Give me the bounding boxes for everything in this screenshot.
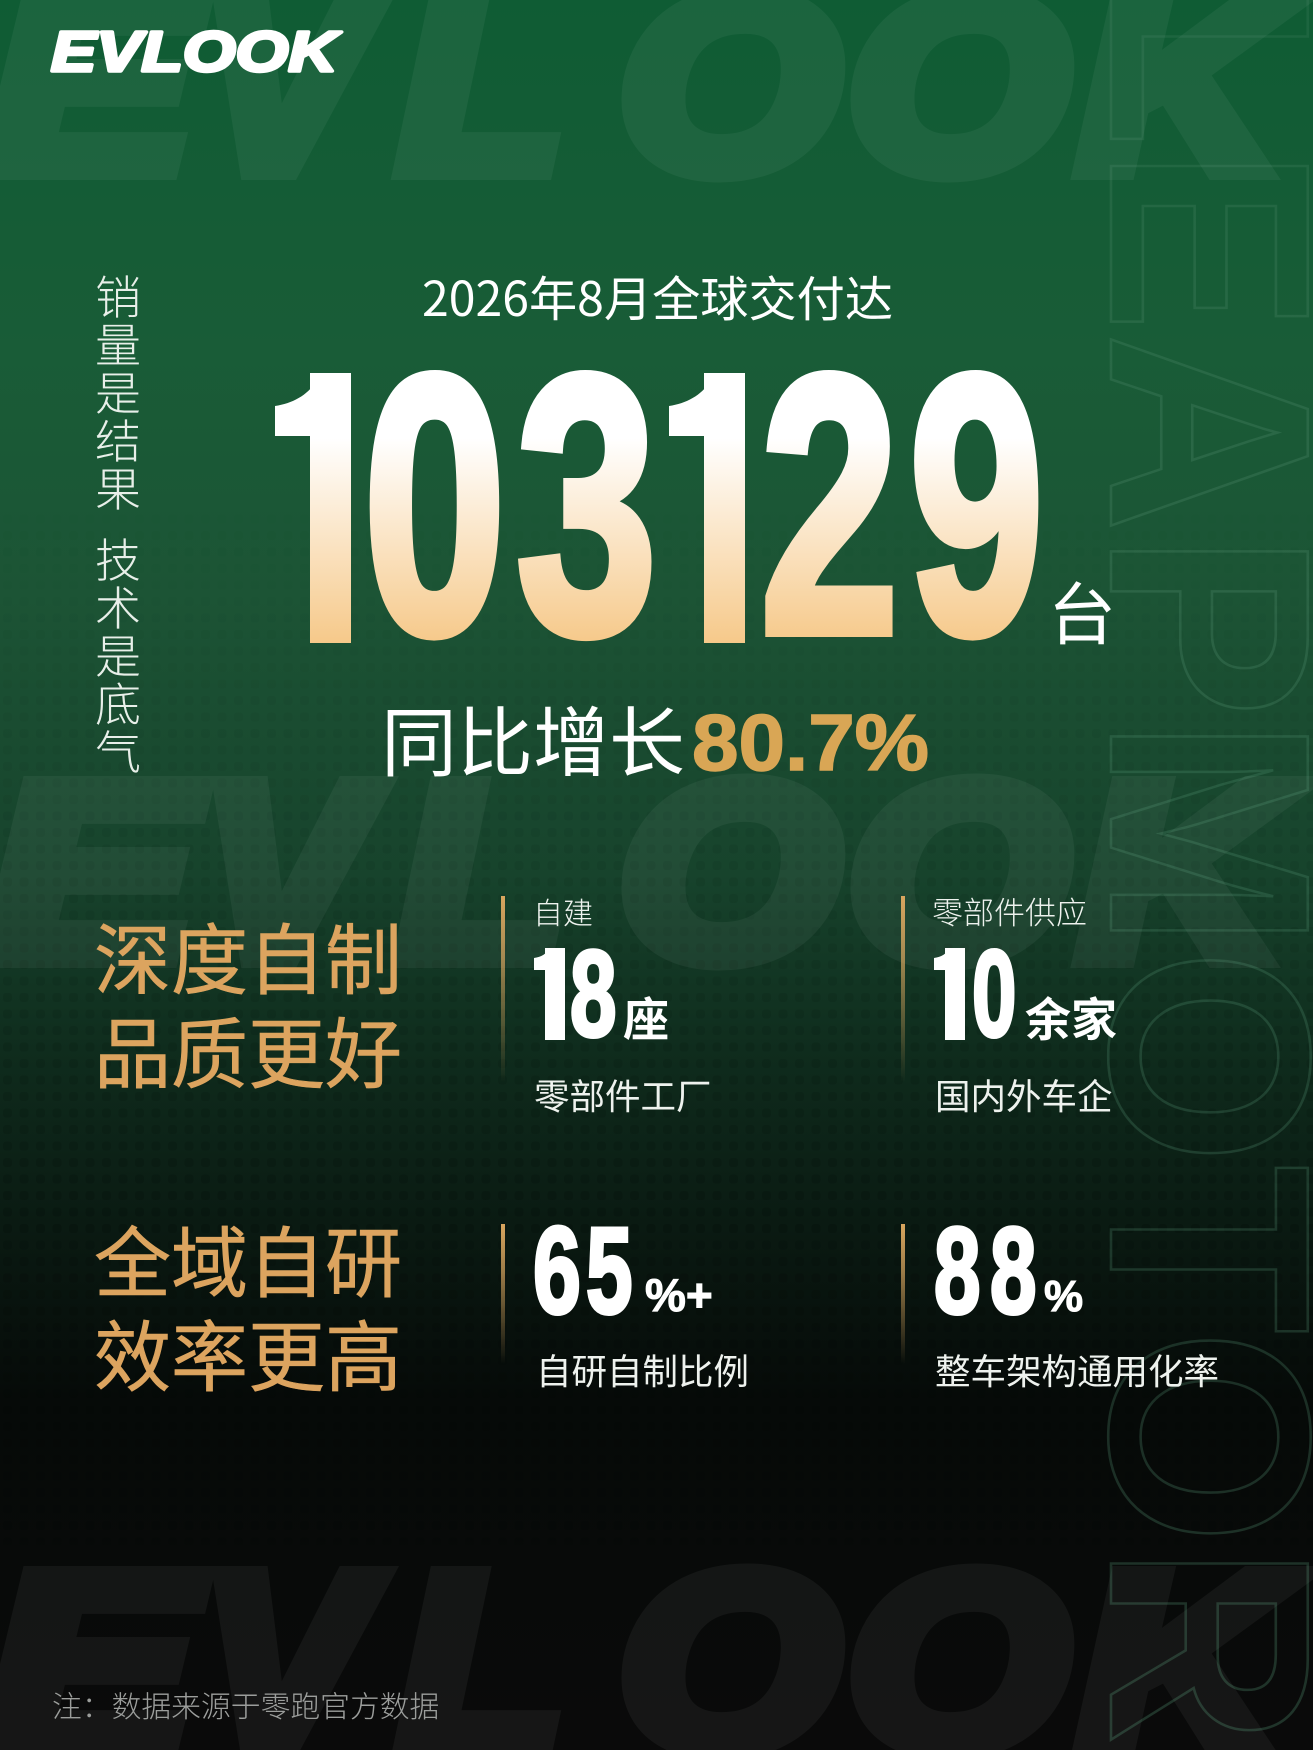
- watermark: EVLOOK middle: L: [399, 732, 564, 1012]
- heading: 全域自研 效率更高: 效率更高: [94, 1316, 402, 1402]
- watermark: EVLOOK middle: [0, 732, 1304, 1012]
- stat: 65%+: 5: [586, 1203, 633, 1340]
- growth label: 同比增长: [381, 702, 685, 787]
- stat: 88%: 整车架构通用化率: [935, 1352, 1219, 1392]
- stat: 10 suppliers: 0: [972, 925, 1016, 1062]
- stat: 10 suppliers: [901, 896, 1117, 1117]
- stat: 10 suppliers: 1: [914, 926, 982, 1063]
- main number 103129: 9: [909, 300, 1044, 711]
- stat: 65%+: 自研自制比例: [536, 1352, 749, 1392]
- watermark: EVLOOK middle: K: [1079, 732, 1304, 1011]
- stat: 18 factories: 座: [623, 994, 669, 1046]
- stat: 65%+: [501, 1203, 749, 1392]
- stat: 10 suppliers: 零部件供应: [932, 896, 1087, 931]
- stat: 18 factories: 自建: [533, 898, 593, 931]
- stat: 88%: [901, 1203, 1219, 1392]
- logo: EVLOOK: EVLOOK: [51, 20, 342, 84]
- stat: 18 factories: [501, 896, 712, 1117]
- stat: 18 factories: 8: [570, 926, 617, 1063]
- growth value: 80.7%: [692, 698, 929, 787]
- watermark: EVLOOK middle: O: [848, 732, 1068, 1011]
- stat: 65%+: 6: [533, 1203, 581, 1340]
- footnote: 注：数据来源于零跑官方数据: [52, 1691, 439, 1724]
- watermark: EVLOOK middle: V: [202, 733, 383, 1012]
- heading: 全域自研 效率更高: [94, 1222, 402, 1402]
- stat: 88%: 8: [990, 1203, 1037, 1340]
- stat: 65%+: %+: [645, 1269, 713, 1321]
- heading: 全域自研 效率更高: 全域自研: [94, 1222, 402, 1308]
- stat: 18 factories: 零部件工厂: [534, 1077, 712, 1117]
- watermark: EVLOOK bottom: [0, 1522, 1304, 1750]
- main number 103129: 1: [221, 300, 405, 711]
- main number 103129: 2: [760, 299, 899, 710]
- main number 103129: 1: [615, 300, 799, 711]
- stat: 10 suppliers: 国内外车企: [935, 1077, 1113, 1117]
- stat: 18 factories: 1: [514, 926, 582, 1063]
- stat: 88%: %: [1044, 1272, 1083, 1321]
- subtitle: 2026年8月全球交付达: [422, 260, 893, 330]
- stat: 10 suppliers: 余家: [1025, 994, 1117, 1046]
- main number 103129: 3: [516, 299, 657, 710]
- slogan: vertical text: 销量是结果技术是底气: [95, 272, 141, 779]
- watermark: EVLOOK middle: O: [619, 732, 839, 1011]
- heading: 深度自制 品质更好: 品质更好: [94, 1013, 402, 1099]
- main number 103129: [275, 370, 1038, 643]
- unit: 台: 台: [1048, 578, 1116, 654]
- stat: 88%: 8: [934, 1203, 981, 1340]
- main number 103129: 0: [363, 299, 506, 711]
- watermark: EVLOOK top: [0, 0, 1304, 224]
- heading: 深度自制 品质更好: [94, 919, 402, 1099]
- halftone texture: [0, 500, 1313, 1550]
- heading: 深度自制 品质更好: 深度自制: [94, 919, 402, 1005]
